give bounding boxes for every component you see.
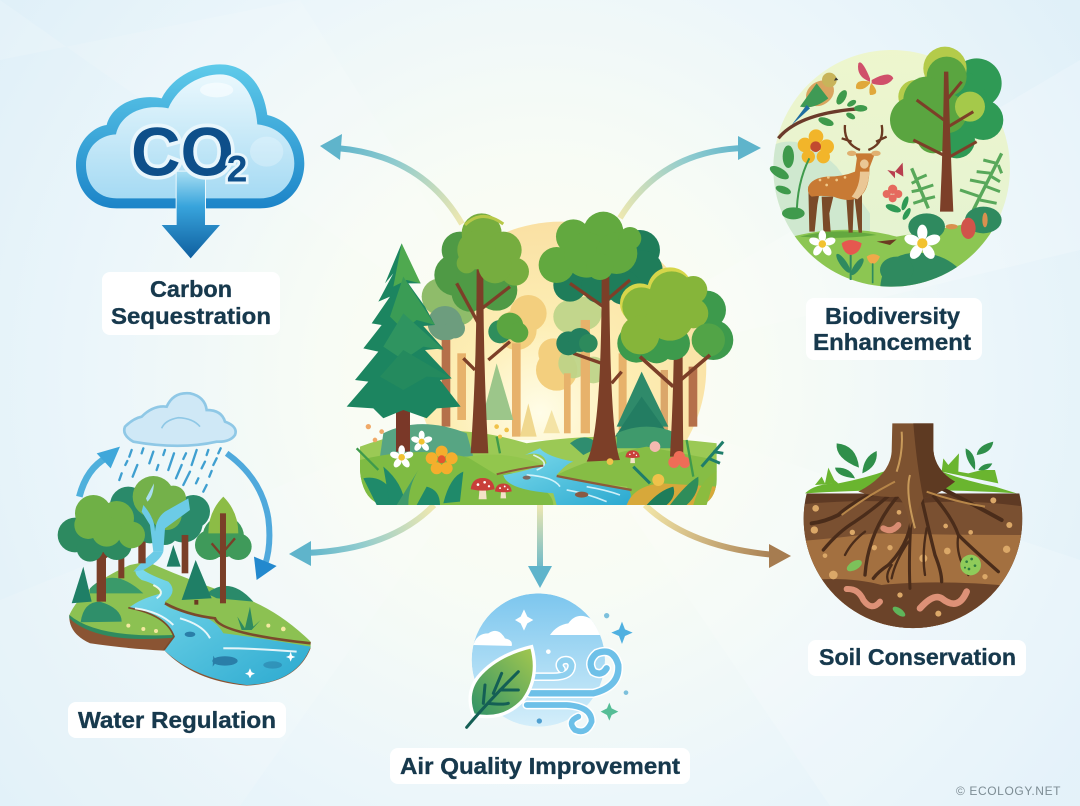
icon: CO2 cloud with down arrow (76, 64, 304, 258)
label: Biodiversity Enhancement (806, 298, 982, 360)
label: Biodiversity Enhancement: Biodiversity (825, 303, 960, 329)
icon: water cycle landscape (58, 393, 311, 686)
distant trees (422, 278, 697, 437)
icon: CO2 cloud with down arrow: 2 (227, 148, 247, 190)
arrow: forest to soil (645, 505, 791, 568)
butterfly (856, 62, 893, 95)
leaf (467, 647, 534, 727)
worms and microbes (845, 525, 981, 619)
copyright: © ECOLOGY.NET (956, 784, 1061, 798)
label: Air Quality Improvement: Air Quality Improvement (400, 753, 680, 779)
label: Carbon Sequestration: Sequestration (111, 303, 271, 329)
sparkles (515, 609, 633, 724)
arrow: forest to water regulation (289, 505, 434, 566)
icon: soil cross-section with roots (804, 423, 1022, 628)
soil layers (804, 493, 1022, 628)
label: Soil Conservation: Soil Conservation (819, 644, 1016, 670)
rain (119, 448, 221, 492)
icon: CO2 cloud with down arrow: CO (131, 114, 234, 191)
label: Air Quality Improvement (390, 748, 690, 784)
trunk and roots (812, 423, 1002, 588)
rain cloud (124, 393, 236, 446)
cycle arrows (79, 447, 277, 580)
conifer left (347, 243, 461, 452)
icon: biodiversity scene (768, 40, 1020, 293)
arrow: forest to biodiversity (620, 136, 761, 218)
tree: middle tall (539, 212, 663, 462)
river (128, 565, 311, 685)
big tree (890, 47, 1003, 212)
sky circle (472, 593, 610, 727)
sun glow (424, 222, 706, 440)
arrow: forest to air quality (528, 505, 552, 588)
wind swirls (527, 652, 618, 731)
tree: right front (617, 267, 733, 457)
label: Carbon Sequestration: Carbon (150, 276, 232, 302)
arrow: forest to carbon sequestration (320, 134, 462, 224)
label: Soil Conservation (808, 640, 1026, 676)
ground (360, 424, 717, 507)
label: Water Regulation (68, 702, 286, 738)
trees (58, 476, 286, 633)
plants and flowers (768, 129, 1002, 283)
grass (805, 442, 1017, 493)
flowers and mushrooms (357, 424, 723, 505)
label: Carbon Sequestration (102, 272, 280, 335)
icon: air quality leaf and wind (467, 593, 633, 731)
label: Biodiversity Enhancement: Enhancement (813, 329, 971, 355)
central forest illustration (347, 212, 733, 513)
label: Water Regulation: Water Regulation (78, 707, 276, 733)
land (69, 562, 311, 686)
bird and branch (778, 73, 867, 138)
deer (808, 125, 887, 233)
tree: left tall (434, 213, 529, 453)
